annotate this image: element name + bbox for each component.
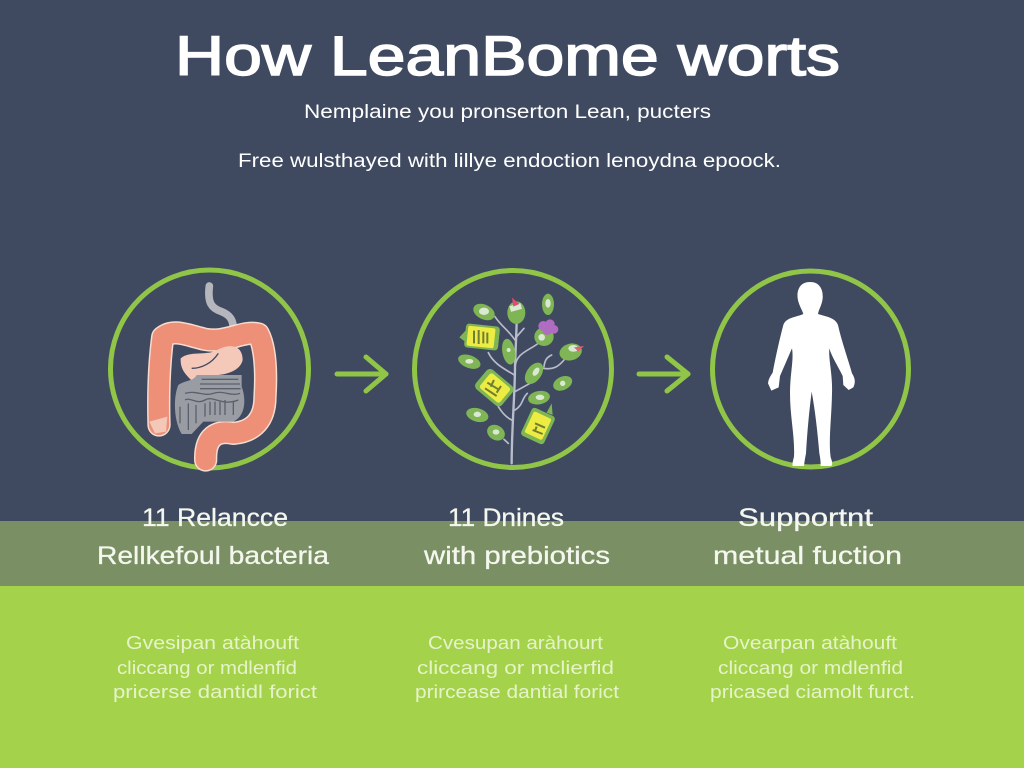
step 2 heading: 11 Dnines [448, 504, 564, 532]
arrow: step 1 to step 2 [337, 357, 386, 391]
step 1 description: Gvesipan atàhouft [126, 633, 299, 653]
icon: prebiotic plant [456, 294, 584, 463]
step 1 description: cliccang or mdlenfid [117, 658, 297, 678]
step 1 heading: 11 Relancce [142, 504, 288, 532]
panel: step 2 prebiotic plant circle [414, 270, 612, 468]
title: How LeanBome worts [175, 24, 840, 87]
subtitle text block: Free wulsthayed with lillye endoction lenoydna epoock. [238, 151, 781, 172]
prebiotic capsules [464, 323, 556, 445]
step 3 description: Ovearpan atàhouft [723, 633, 897, 653]
icon: digestive system [149, 286, 266, 460]
step 2 heading [423, 504, 610, 570]
icon ring: step 2 [414, 270, 612, 468]
step 2 heading: with prebiotics [423, 542, 610, 570]
step 1 description [113, 633, 317, 702]
step 3 description: cliccang or mdlenfid [718, 658, 903, 678]
step 1 heading: Rellkefoul bacteria [97, 542, 329, 570]
subtitle text block: Nemplaine you pronserton Lean, pucters [304, 102, 711, 123]
step 3 description [710, 633, 915, 702]
step 3 heading: Supportnt [738, 504, 873, 532]
step 2 description: prircease dantial forict [415, 682, 619, 702]
arrow: step 2 to step 3 [639, 357, 688, 391]
panel: step 1 gut circle [110, 270, 308, 468]
icon: human silhouette [768, 282, 855, 466]
step 2 description: Cvesupan aràhourt [428, 633, 603, 653]
icon ring: step 1 [110, 270, 308, 468]
step 3 heading: metual fuction [713, 542, 902, 570]
panel: translucent heading band [0, 521, 1024, 586]
icon ring: step 3 [712, 271, 908, 467]
flower buds [512, 298, 584, 351]
step 2 description [415, 633, 619, 702]
step 1 heading [97, 504, 329, 570]
subtitle text block [238, 102, 781, 172]
step 2 description: cliccang or mclierfid [417, 658, 614, 678]
panel: green description band [0, 586, 1024, 768]
panel: step 3 body circle [712, 271, 908, 467]
step 3 heading [713, 504, 902, 570]
step 1 description: pricerse dantidl forict [113, 682, 317, 702]
step 3 description: pricased ciamolt furct. [710, 682, 915, 702]
